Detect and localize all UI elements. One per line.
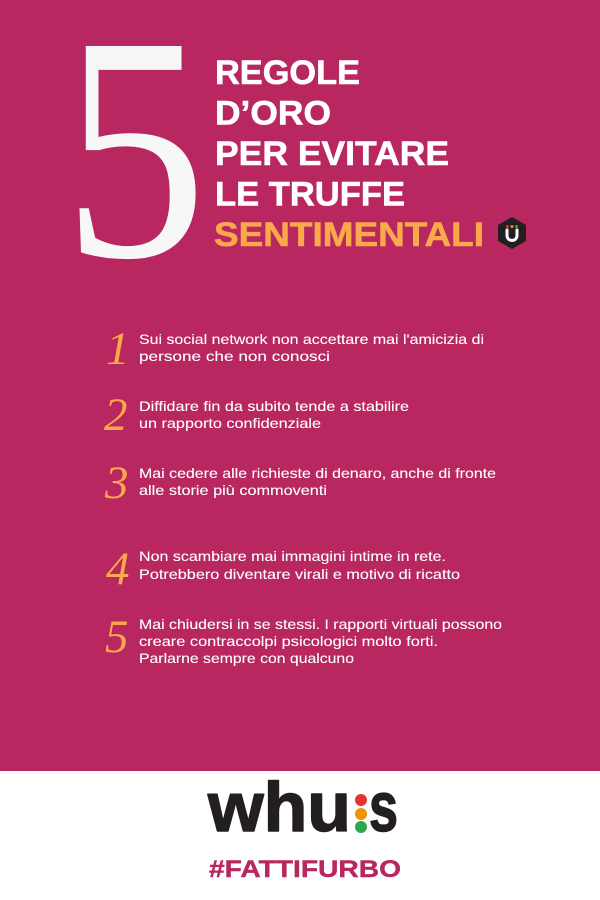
rule 4: Non scambiare mai immagini intime in rete. (139, 548, 446, 564)
rule 1: Sui social network non accettare mai l'amicizia di (139, 331, 484, 347)
title: PER EVITARE (215, 135, 449, 173)
icon: whuis hexagon badge (498, 217, 526, 249)
logo: whu:s: s (369, 768, 398, 846)
rule 4: Potrebbero diventare virali e motivo di ricatto (139, 566, 460, 582)
hashtag: #FATTIFURBO (209, 856, 401, 883)
rule 4: 4 (106, 543, 130, 595)
rule 4 (106, 543, 460, 595)
rule 3: alle storie più commoventi (139, 482, 327, 498)
rule 1: 1 (106, 323, 130, 375)
title (214, 54, 484, 254)
title: LE TRUFFE (215, 176, 405, 214)
rule 5: Mai chiudersi in se stessi. I rapporti virtuali possono (139, 616, 502, 632)
title: SENTIMENTALI (214, 216, 484, 254)
rule 3: Mai cedere alle richieste di denaro, anche di fronte (139, 465, 496, 481)
rule 2: un rapporto confidenziale (139, 415, 321, 431)
rule 5: 5 (105, 611, 128, 663)
rule 5: creare contraccolpi psicologici molto forti. (139, 633, 438, 649)
rule 1: persone che non conosci (139, 348, 330, 364)
title: REGOLE (215, 54, 360, 92)
rule 2: Diffidare fin da subito tende a stabilire (139, 398, 409, 414)
rule 2: 2 (104, 389, 128, 441)
rule 5: Parlarne sempre con qualcuno (139, 650, 354, 666)
rule 2 (104, 389, 409, 441)
rule 5 (105, 611, 502, 666)
footer panel (0, 768, 600, 900)
rule 3 (104, 457, 496, 509)
logo: whu:s: whu (207, 768, 351, 846)
rule 3: 3 (104, 457, 128, 509)
title: D’ORO (215, 94, 331, 132)
rule 1 (106, 323, 484, 375)
